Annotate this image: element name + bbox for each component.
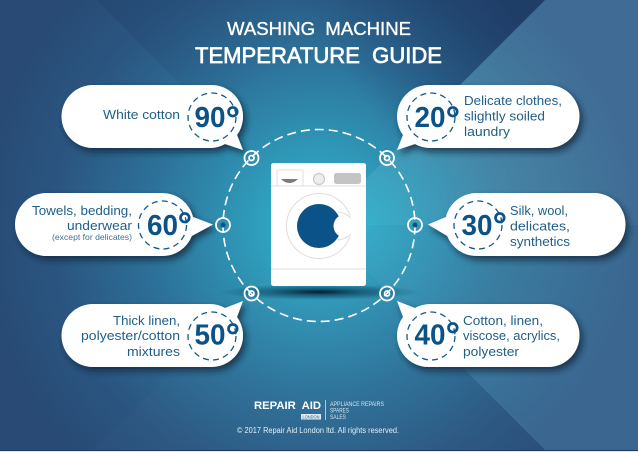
temperature dial: ° [492, 206, 507, 248]
temperature dial: ° [177, 206, 192, 248]
label: silk, wool: delicates, [510, 218, 570, 234]
temperature dial: 40 [414, 320, 446, 352]
label: towels, bedding, underwear: Towels, bedding, [32, 203, 132, 218]
ring nodes [216, 151, 422, 300]
temperature dial: ° [445, 100, 460, 142]
temperature dial: ° [445, 316, 460, 358]
label: cotton, linen [463, 313, 560, 359]
logo: Repair Aid [254, 400, 384, 421]
temperature dial: 30 [462, 210, 492, 242]
panel: 90 degrees white cotton [62, 85, 243, 150]
label: thick linen: mixtures [127, 344, 181, 359]
label: towels, bedding, underwear: underwear [67, 218, 133, 233]
dashed ring [223, 130, 415, 322]
label: thick linen: polyester/cotton [81, 328, 180, 343]
temperature dial [454, 201, 507, 249]
temperature dial [138, 201, 192, 249]
label: silk, wool: Silk, wool, [510, 203, 568, 218]
title: TEMPERATURE GUIDE [195, 43, 442, 68]
logo: Repair Aid: SPARES [330, 408, 349, 414]
temperature dial: 20 [414, 102, 446, 134]
temperature dial: 60 [147, 210, 178, 242]
label: towels, bedding, underwear: (except for delicates) [52, 232, 132, 242]
logo: Repair Aid: REPAIR AID [254, 400, 321, 412]
label: cotton, linen: Cotton, linen, [463, 313, 543, 328]
label: thick linen: Thick linen, [113, 313, 180, 328]
label: delicate clothes [464, 93, 562, 139]
label: cotton, linen: polyester [463, 344, 520, 359]
label: cotton, linen: viscose, acrylics, [463, 328, 560, 343]
panel: 30 degrees silk, wool [428, 193, 626, 256]
panel: 20 degrees delicate clothes [397, 85, 580, 150]
logo: Repair Aid: APPLIANCE REPAIRS [330, 402, 384, 408]
temperature dial [188, 93, 240, 142]
title [195, 19, 442, 68]
label: silk, wool [510, 203, 571, 249]
label: delicate clothes: Delicate clothes, [464, 93, 562, 108]
title: WASHING MACHINE [227, 19, 411, 39]
temperature dial: 50 [194, 320, 226, 352]
label: delicate clothes: laundry [464, 124, 511, 139]
logo: Repair Aid: SALES [330, 415, 346, 421]
panel: 60 degrees towels [15, 193, 213, 256]
temperature dial: ° [225, 100, 240, 142]
label: thick linen [81, 313, 181, 359]
label: towels, bedding, underwear [32, 203, 133, 242]
label: white cotton: White cotton [103, 107, 180, 122]
logo: Repair Aid: LONDON [302, 414, 320, 420]
temperature dial [188, 312, 240, 360]
temperature dial: 90 [194, 102, 226, 134]
panel: 50 degrees thick linen [62, 301, 243, 367]
washer floor shadow [219, 284, 419, 300]
temperature dial [407, 93, 460, 142]
icon: washing machine [271, 163, 366, 286]
temperature dial: ° [225, 317, 240, 359]
temperature dial [407, 312, 460, 360]
label: silk, wool: synthetics [510, 234, 571, 249]
copyright: © 2017 Repair Aid London ltd. All rights reserved. [237, 426, 399, 435]
label: delicate clothes: slightly soiled [464, 108, 545, 124]
panel: 40 degrees cotton, linen [397, 301, 580, 367]
